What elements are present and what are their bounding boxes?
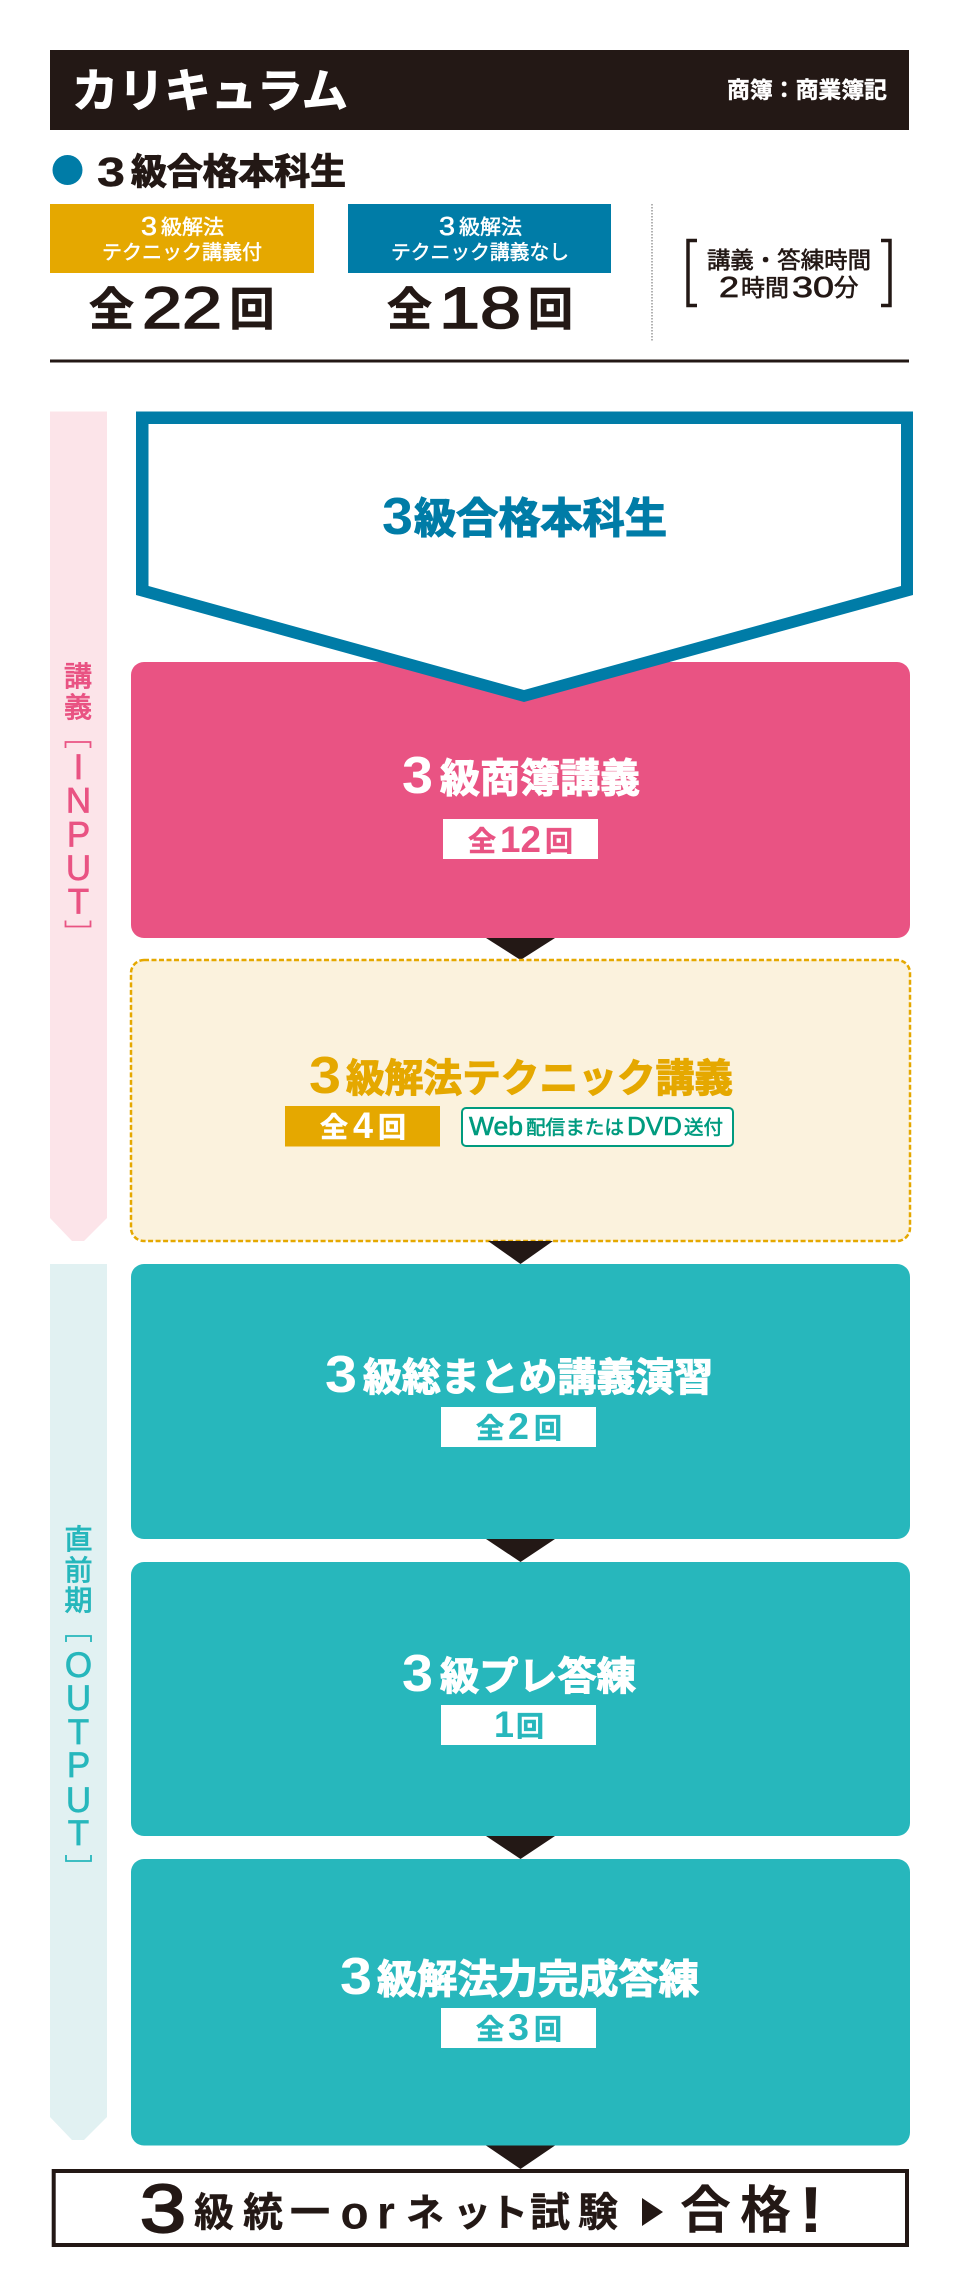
delivery tag xyxy=(462,1108,733,1146)
panel: 3級商簿講義: 3 xyxy=(402,747,433,805)
title: カリキュラム xyxy=(72,65,348,117)
goal box: ッ xyxy=(453,2193,491,2235)
plan: with technique lecture xyxy=(50,204,314,341)
banner: 3級合格本科生: 3 xyxy=(382,488,413,546)
arrow xyxy=(486,1539,555,1562)
abbreviation note: 商簿：商業簿記 xyxy=(727,78,887,103)
banner: 3級合格本科生: 級合格本科生 xyxy=(414,495,667,542)
banner: 3級合格本科生 xyxy=(136,412,913,702)
plan: with technique lecture: 22 xyxy=(142,276,222,341)
panel: 3級総まとめ講義演習: 回 xyxy=(534,1413,562,1444)
panel: 3級プレ答練: 1 xyxy=(494,1704,514,1745)
panel: 3級解法力完成答練: 3 xyxy=(508,2007,529,2048)
lesson time note: 分 xyxy=(834,275,858,302)
goal box: ! xyxy=(799,2173,823,2246)
plan: without technique lecture: テクニック講義なし xyxy=(391,241,569,264)
plan: with technique lecture: テクニック講義付 xyxy=(102,241,262,264)
panel: 3級解法力完成答練: 3 xyxy=(340,1948,372,2006)
goal box: 合 xyxy=(680,2182,731,2239)
side band: lecture input: T xyxy=(68,882,89,922)
left bracket xyxy=(688,240,697,306)
side band: final stage output: 直 xyxy=(64,1524,93,1555)
goal box: 統 xyxy=(243,2191,283,2235)
plan: without technique lecture: 18 xyxy=(439,276,521,341)
goal box: o xyxy=(340,2186,369,2238)
side band: lecture input: U xyxy=(66,849,91,888)
side band: lecture input: P xyxy=(67,816,90,854)
course heading: 級合格本科生 xyxy=(131,151,346,192)
panel: 3級総まとめ講義演習: 級総まとめ講義演習 xyxy=(363,1357,713,1400)
side band: final stage output: P xyxy=(67,1746,90,1785)
goal box: ネ xyxy=(406,2193,444,2235)
plan: without technique lecture: 級解法 xyxy=(459,216,522,239)
side band: lecture input: 講 xyxy=(64,661,92,692)
panel: 3級解法テクニック講義: 4 xyxy=(353,1105,373,1146)
panel: 3級総まとめ講義演習: 2 xyxy=(508,1406,529,1447)
lesson time note: 講義・答練時間 xyxy=(707,247,871,273)
arrow xyxy=(486,1836,555,1859)
panel: 3級プレ答練 xyxy=(131,1562,910,1836)
goal box: r xyxy=(377,2186,395,2238)
panel: 3級総まとめ講義演習: 3 xyxy=(325,1346,357,1404)
arrow xyxy=(488,1241,553,1264)
panel: 3級商簿講義: 級商簿講義 xyxy=(440,757,640,801)
panel: 3級商簿講義 xyxy=(131,662,910,938)
plan: with technique lecture: 全 xyxy=(89,284,134,335)
course heading: 3 xyxy=(97,149,125,195)
side band: lecture input: I xyxy=(74,748,83,787)
side band: final stage output: T xyxy=(68,1713,89,1752)
arrow xyxy=(486,2146,555,2169)
goal box: 一 xyxy=(290,2191,330,2235)
delivery tag: DVD xyxy=(627,1111,682,1141)
panel: 3級解法力完成答練: 回 xyxy=(534,2014,562,2045)
panel: 3級プレ答練: 級プレ答練 xyxy=(440,1656,636,1699)
panel: 3級解法テクニック講義: 全 xyxy=(320,1112,348,1143)
side band: lecture input xyxy=(50,412,107,1241)
goal box: 3 xyxy=(140,2171,186,2247)
panel: 3級プレ答練: 回 xyxy=(516,1711,544,1742)
panel: 3級解法力完成答練: 級解法力完成答練 xyxy=(377,1958,699,2002)
side band: final stage output: 期 xyxy=(64,1585,93,1616)
panel: 3級解法テクニック講義: 3 xyxy=(309,1047,341,1105)
lesson time note: 時間 xyxy=(741,275,789,301)
plan: without technique lecture: 回 xyxy=(528,284,573,335)
goal box: 試 xyxy=(530,2191,570,2235)
delivery tag: 配信または xyxy=(526,1117,624,1139)
panel: 3級解法テクニック講義 xyxy=(131,960,910,1241)
goal box: 験 xyxy=(578,2191,618,2235)
side band: lecture input: N xyxy=(66,782,91,820)
panel: 3級プレ答練: 3 xyxy=(402,1645,433,1703)
goal box: ト xyxy=(490,2193,528,2235)
side band: final stage output xyxy=(50,1264,107,2140)
icon: triangle xyxy=(642,2198,663,2226)
panel: 3級解法テクニック講義: 回 xyxy=(378,1112,406,1143)
goal box xyxy=(54,2171,907,2247)
lesson time note: 30 xyxy=(792,272,834,304)
goal box: 格 xyxy=(740,2182,791,2239)
course heading xyxy=(52,149,346,195)
goal box: 級 xyxy=(194,2191,234,2235)
panel: 3級商簿講義: 12 xyxy=(500,819,541,860)
panel: 3級商簿講義: 回 xyxy=(545,826,573,857)
icon: blue dot xyxy=(52,155,82,185)
side band: final stage output: T xyxy=(68,1814,89,1853)
arrow xyxy=(486,938,555,960)
right bracket xyxy=(881,240,890,306)
side band: final stage output: O xyxy=(65,1646,92,1685)
side band: lecture input: 義 xyxy=(64,692,92,723)
plan: with technique lecture: 級解法 xyxy=(161,216,224,239)
panel: 3級解法テクニック講義: 級解法テクニック講義 xyxy=(346,1058,733,1101)
panel: 3級総まとめ講義演習: 全 xyxy=(476,1413,504,1444)
plan: with technique lecture: 3 xyxy=(141,211,157,241)
panel: 3級解法力完成答練 xyxy=(131,1859,910,2146)
lesson time note: 2 xyxy=(719,272,739,304)
header bar xyxy=(50,50,909,130)
panel: 3級商簿講義: 全 xyxy=(468,826,496,857)
delivery tag: Web xyxy=(469,1111,523,1141)
delivery tag: 送付 xyxy=(684,1117,723,1139)
plan: without technique lecture: 3 xyxy=(439,211,455,241)
panel: 3級総まとめ講義演習 xyxy=(131,1264,910,1539)
side band: final stage output: U xyxy=(66,1679,91,1718)
side band: final stage output: 前 xyxy=(64,1555,93,1586)
plan: without technique lecture xyxy=(348,204,611,341)
panel: 3級解法力完成答練: 全 xyxy=(476,2014,504,2045)
plan: with technique lecture: 回 xyxy=(230,284,275,335)
lesson time note xyxy=(688,240,890,306)
plan: without technique lecture: 全 xyxy=(387,284,432,335)
side band: final stage output: U xyxy=(66,1781,91,1820)
